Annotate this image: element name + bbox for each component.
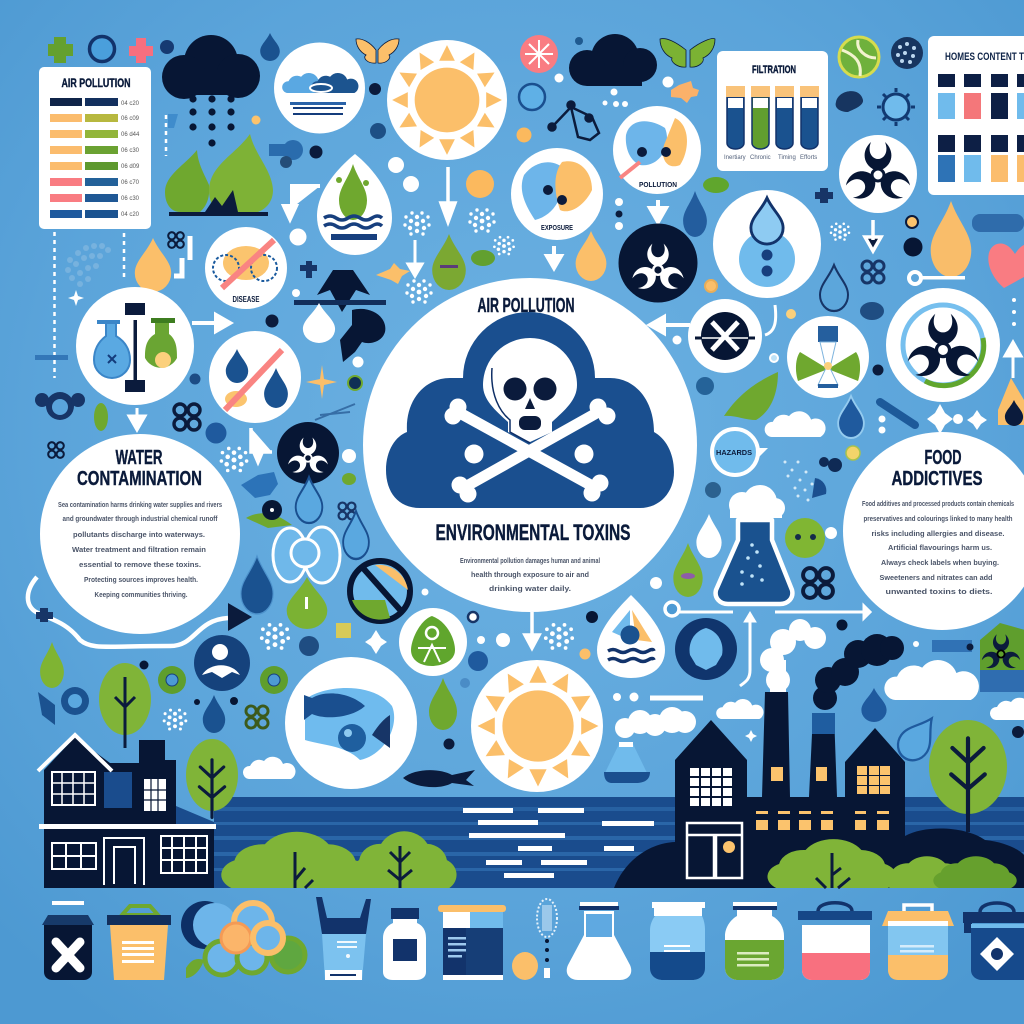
icon: dotted dark ball <box>891 37 923 69</box>
icon: pink heart <box>988 243 1024 288</box>
brush handle dots <box>544 939 550 978</box>
knot icon <box>803 568 833 598</box>
icon: outlined drop <box>820 265 848 311</box>
icon: bar capsule <box>972 214 1024 232</box>
icon: small target <box>160 40 174 54</box>
panel: no-chemicals circle <box>205 227 287 309</box>
white cloud left <box>243 757 296 779</box>
arrow: down from main <box>525 612 539 648</box>
faint wave marks <box>315 404 355 420</box>
icon: green face drop <box>287 577 327 629</box>
panel: right bottle chart <box>928 36 1024 195</box>
icon: orange butterfly <box>356 39 399 63</box>
icon: green face drop <box>432 234 466 290</box>
faint dot cluster <box>65 243 111 287</box>
factory <box>614 692 1024 888</box>
icon: orange sun <box>387 40 507 160</box>
box: orange <box>882 905 954 980</box>
icon: knot small <box>168 232 184 248</box>
icon: navy dot <box>310 146 322 158</box>
icon: green dot <box>342 473 356 485</box>
flask: white <box>567 902 631 980</box>
body text: pollutants discharge into waterways. <box>73 530 205 539</box>
panel: fish circle <box>285 657 417 789</box>
icon: skull cloud <box>386 312 674 508</box>
icon: pink plus <box>129 38 153 63</box>
test tubes <box>727 97 818 149</box>
icon: arrow white small <box>251 428 272 462</box>
panel: cloud circle <box>274 42 365 134</box>
icon: blue bubble ring <box>519 84 545 110</box>
snow clusters top <box>403 208 515 304</box>
white dot <box>825 527 837 539</box>
white smoke <box>760 619 826 692</box>
panel: green lime circle <box>399 608 467 676</box>
body text: Artificial flavourings harm us. <box>888 543 992 552</box>
arrows around flask <box>670 606 870 686</box>
panel: navy hazard small <box>277 422 339 484</box>
arrow: to drops <box>192 315 230 331</box>
arrow: white vertical <box>441 167 455 222</box>
icon: small teal ring <box>575 37 583 45</box>
white cloud <box>716 699 763 719</box>
blue shape <box>168 114 178 128</box>
body text: health through exposure to air and <box>471 570 589 579</box>
icon: gold star <box>306 365 337 399</box>
panel: navy biohazard <box>618 224 698 302</box>
icon: blue ball <box>468 651 488 671</box>
icons: hazard badge <box>980 623 1024 692</box>
panel: toxic exposure circle <box>613 106 701 194</box>
icon: navy bug <box>300 261 317 278</box>
snow <box>163 447 574 731</box>
icon: gold square <box>336 623 351 638</box>
panel: drops circle <box>209 331 301 423</box>
icon: orange drop <box>135 238 171 292</box>
panel: toxic mix circle: EXPOSURE <box>541 225 573 232</box>
icon: navy blob <box>860 302 884 320</box>
body text <box>460 556 600 593</box>
sea <box>214 797 1024 888</box>
heading <box>77 447 202 490</box>
icon: green drop left <box>40 642 64 688</box>
cup: lidded <box>438 905 506 980</box>
body text <box>862 499 1014 596</box>
tree: right <box>929 720 1007 832</box>
icon: blue ball <box>206 422 226 444</box>
icon: dotted brush <box>537 899 557 937</box>
factory door <box>687 823 742 878</box>
body text: Sweeteners and nitrates can add <box>880 573 993 582</box>
icon: blue rose <box>38 687 89 725</box>
heading <box>892 447 982 490</box>
icon: green dot <box>348 376 362 390</box>
icon: pink ball <box>520 35 558 73</box>
white dots <box>878 416 886 434</box>
panel: water contamination <box>40 434 240 634</box>
icon: orange dot <box>252 116 260 124</box>
body text: Water treatment and filtration remain <box>72 545 206 554</box>
navy dot right <box>1012 726 1024 738</box>
icon: green drop <box>429 678 457 730</box>
icon: orange dot <box>786 309 796 319</box>
dots near sun <box>613 692 638 702</box>
icons: knots <box>48 404 355 728</box>
body text: unwanted toxins to diets. <box>886 587 992 596</box>
heading: CONTAMINATION <box>77 468 202 490</box>
icon: key ring <box>909 272 965 284</box>
panel: big drop circle <box>713 190 821 298</box>
icons: sparkles <box>927 404 987 434</box>
icon: orange dot <box>580 648 590 660</box>
body text: Environmental pollution damages human and animal <box>460 556 600 565</box>
panel: large biohazard ring <box>886 288 1000 402</box>
factory windows <box>690 768 732 806</box>
icon: recycle arrows with drop <box>294 270 386 362</box>
icon: flask with cloud <box>716 485 792 604</box>
icon: blue slim drop <box>683 191 707 237</box>
icon: green leaves <box>165 134 273 216</box>
tree: house <box>186 739 238 817</box>
body text <box>58 500 222 599</box>
arrow: white to dark tip <box>865 220 881 251</box>
icon: cloud <box>765 411 826 437</box>
icon: no sign <box>350 561 410 621</box>
icon: blue device <box>241 472 278 498</box>
arrow: white up right <box>1005 342 1021 378</box>
tree: upper left <box>99 663 151 748</box>
icon: small ring <box>370 123 386 139</box>
arrow: left to main <box>650 317 690 333</box>
panel: leaf egg with waves <box>317 154 392 255</box>
body text: essential to remove these toxins. <box>79 560 201 569</box>
arrow: curved white path with navy head <box>28 577 252 647</box>
panel: navy skull disc <box>194 635 250 691</box>
panel: second sun <box>471 660 603 792</box>
captions: Chronic <box>750 155 771 161</box>
icon: green blob <box>703 177 729 193</box>
dots <box>140 660 238 705</box>
icon: faint dot <box>460 678 470 688</box>
icon: orange big drop <box>931 201 971 277</box>
icon: blue curled drop <box>892 710 944 766</box>
arrow: white elbow from egg <box>284 186 320 219</box>
bottle: white <box>383 908 426 980</box>
white dot <box>650 577 662 589</box>
icons: small ringed dots <box>904 216 922 256</box>
arrow: white elbow <box>174 236 190 276</box>
captions: Efforts <box>800 155 817 161</box>
icon: ring connector <box>665 602 679 616</box>
white bubbles <box>554 74 674 107</box>
icon: navy animal top left <box>35 392 85 420</box>
dot stack <box>615 198 623 230</box>
icon: orange egg <box>512 952 538 980</box>
icon: sparkle <box>68 290 84 306</box>
icon: blue device <box>269 140 303 168</box>
body text: and groundwater through industrial chemical runoff <box>62 514 218 523</box>
dark smoke <box>813 634 904 710</box>
icon: green drop with face <box>673 543 703 597</box>
icon: navy dot <box>369 83 381 95</box>
main panel: environmental toxins <box>363 278 697 612</box>
panel: air pollution table <box>39 67 151 229</box>
icon: arrow down white <box>547 246 561 268</box>
bush trunks <box>295 846 850 888</box>
bottles <box>938 74 1024 182</box>
icon: tick bar left of badge <box>913 640 974 652</box>
box: pink <box>798 903 872 980</box>
icon: navy bug small <box>36 608 53 622</box>
heading: environmental toxins: ENVIRONMENTAL TOXINS <box>436 520 630 545</box>
icon: gold ring <box>846 446 860 460</box>
icons: drop right <box>861 688 887 722</box>
white dots <box>342 449 510 647</box>
icon: fish <box>403 770 475 787</box>
jar: green <box>725 902 784 980</box>
panel: toxic mix circle <box>511 148 603 240</box>
heading: WATER <box>116 447 163 469</box>
icon: orange ball <box>466 170 494 198</box>
table rows: 06 c30 <box>121 148 140 154</box>
icon: green splat <box>471 250 495 266</box>
icon: small flask boat <box>604 742 650 783</box>
icon: orange dot <box>516 128 532 142</box>
icon: green plus <box>48 37 73 63</box>
speech bubble <box>712 429 768 475</box>
panel: X circle <box>688 299 762 373</box>
jar: blue <box>650 902 705 980</box>
icon: down arrow left <box>129 408 145 430</box>
icon: outlined drop <box>343 511 369 559</box>
table rows: 06 c09 <box>121 116 140 122</box>
icon: green eye <box>246 500 292 528</box>
icon: dark cloud <box>569 34 657 86</box>
panel: no-chemicals circle: DISEASE <box>232 295 260 304</box>
heading: FILTRATION <box>752 64 796 76</box>
panel: biohazard circle <box>839 135 917 213</box>
icon: black drop in orange <box>1005 400 1023 426</box>
icon: molecule small <box>862 261 884 283</box>
icon: green leaf <box>724 372 778 420</box>
icon: outlined drop <box>296 477 322 523</box>
panel: radiation flask circle <box>787 316 869 398</box>
white star <box>745 730 757 742</box>
house windows <box>52 772 207 885</box>
white dot <box>672 336 682 344</box>
arrow: white down <box>650 200 666 222</box>
small white arrow bar <box>650 696 703 700</box>
icon: navy dot <box>266 314 278 328</box>
icon: ring small <box>705 482 721 498</box>
icon: green tennis ball <box>839 37 879 77</box>
icon: ring dot <box>770 354 778 362</box>
icon: blue wrench <box>880 402 915 425</box>
icon: white drop <box>696 514 722 558</box>
panel: filtration test tubes <box>717 51 828 171</box>
icon: green face <box>785 518 825 558</box>
arrow: small white <box>408 240 422 276</box>
icon: dark virus <box>299 636 319 656</box>
icon: blue ring <box>90 36 114 62</box>
table rows: 06 d09 <box>121 164 140 170</box>
table rows <box>50 98 140 218</box>
icon: blue large drop <box>241 556 273 614</box>
icon: navy drop <box>260 33 280 61</box>
icon: molecule <box>548 102 599 140</box>
icon: green sprig <box>94 403 108 431</box>
icon: navy dots <box>586 611 848 630</box>
body text: risks including allergies and disease. <box>872 529 1004 538</box>
cup: navy <box>316 897 371 980</box>
icon: orange plus <box>671 81 699 103</box>
dash bar <box>35 355 68 360</box>
arrow: curve hook <box>765 305 776 335</box>
icon: green butterfly <box>660 39 715 67</box>
icon: ring small <box>468 612 478 622</box>
icon: navy blob <box>812 457 842 498</box>
panel: food additives <box>843 432 1024 630</box>
heading: FOOD <box>924 447 962 469</box>
white cloud: far right <box>990 698 1024 720</box>
bushes <box>221 831 1017 888</box>
icon: tangled rings <box>181 901 305 978</box>
panel: toxic exposure circle: POLLUTION <box>639 182 677 189</box>
captions: Timing <box>778 155 796 161</box>
white cloud: top factory <box>884 660 979 700</box>
white wave dashes <box>463 808 654 878</box>
body text: drinking water daily. <box>489 584 571 593</box>
captions: Inertiary <box>724 155 746 161</box>
panel: navy flower circle <box>675 618 737 680</box>
white bubbles <box>290 157 419 368</box>
table rows: 06 c70 <box>121 180 140 186</box>
icon: blue dot <box>696 377 714 395</box>
icon: dotted spray <box>784 460 814 502</box>
icon: orange speckled drop <box>576 231 606 281</box>
box: navy hazard <box>963 903 1024 980</box>
panel: flasks circle <box>76 287 194 405</box>
table rows: 06 c30 <box>121 196 140 202</box>
table rows: 04 c20 <box>121 101 140 107</box>
icon: navy dot <box>872 364 884 376</box>
captions <box>724 155 817 161</box>
table rows: 06 d44 <box>121 132 140 138</box>
heading: air pollution: AIR POLLUTION <box>478 295 574 317</box>
icon: orange ring dot <box>705 280 717 292</box>
body text: Always check labels when buying. <box>881 558 999 567</box>
icon: blue drop <box>203 695 225 733</box>
body text: Protecting sources improves health. <box>84 575 198 584</box>
bin: orange <box>107 906 171 980</box>
icon: white cracked cell <box>273 527 340 583</box>
icon: blue outlined drop <box>838 396 864 438</box>
icon: dark rain cloud <box>162 35 260 147</box>
icon: dark dot small <box>190 374 200 384</box>
dashed connector lines <box>54 115 166 378</box>
body text: Sea contamination harms drinking water supplies and rivers <box>58 500 222 509</box>
icon: orange star <box>376 263 410 284</box>
heading: ADDICTIVES <box>892 468 982 490</box>
icon: navy bug <box>815 188 833 203</box>
bin: X <box>42 901 94 980</box>
icon: ring dark <box>444 738 454 750</box>
heading: air pollution: AIR POLLUTION <box>62 76 130 90</box>
icon: virus <box>877 88 915 126</box>
speech bubble: HAZARDS <box>716 450 752 457</box>
icon: orange tri <box>998 378 1024 425</box>
icons: green flowers <box>158 666 288 694</box>
table rows: 04 c20 <box>121 212 140 218</box>
icon: white sparkle <box>365 630 387 654</box>
panel: drop with waves <box>597 595 665 678</box>
icon: dark blob <box>836 91 863 112</box>
icon: smoke white pale <box>615 707 696 738</box>
snow <box>830 222 850 241</box>
house <box>38 735 216 888</box>
icon: dots right <box>993 298 1016 332</box>
body text: Keeping communities thriving. <box>94 590 188 599</box>
